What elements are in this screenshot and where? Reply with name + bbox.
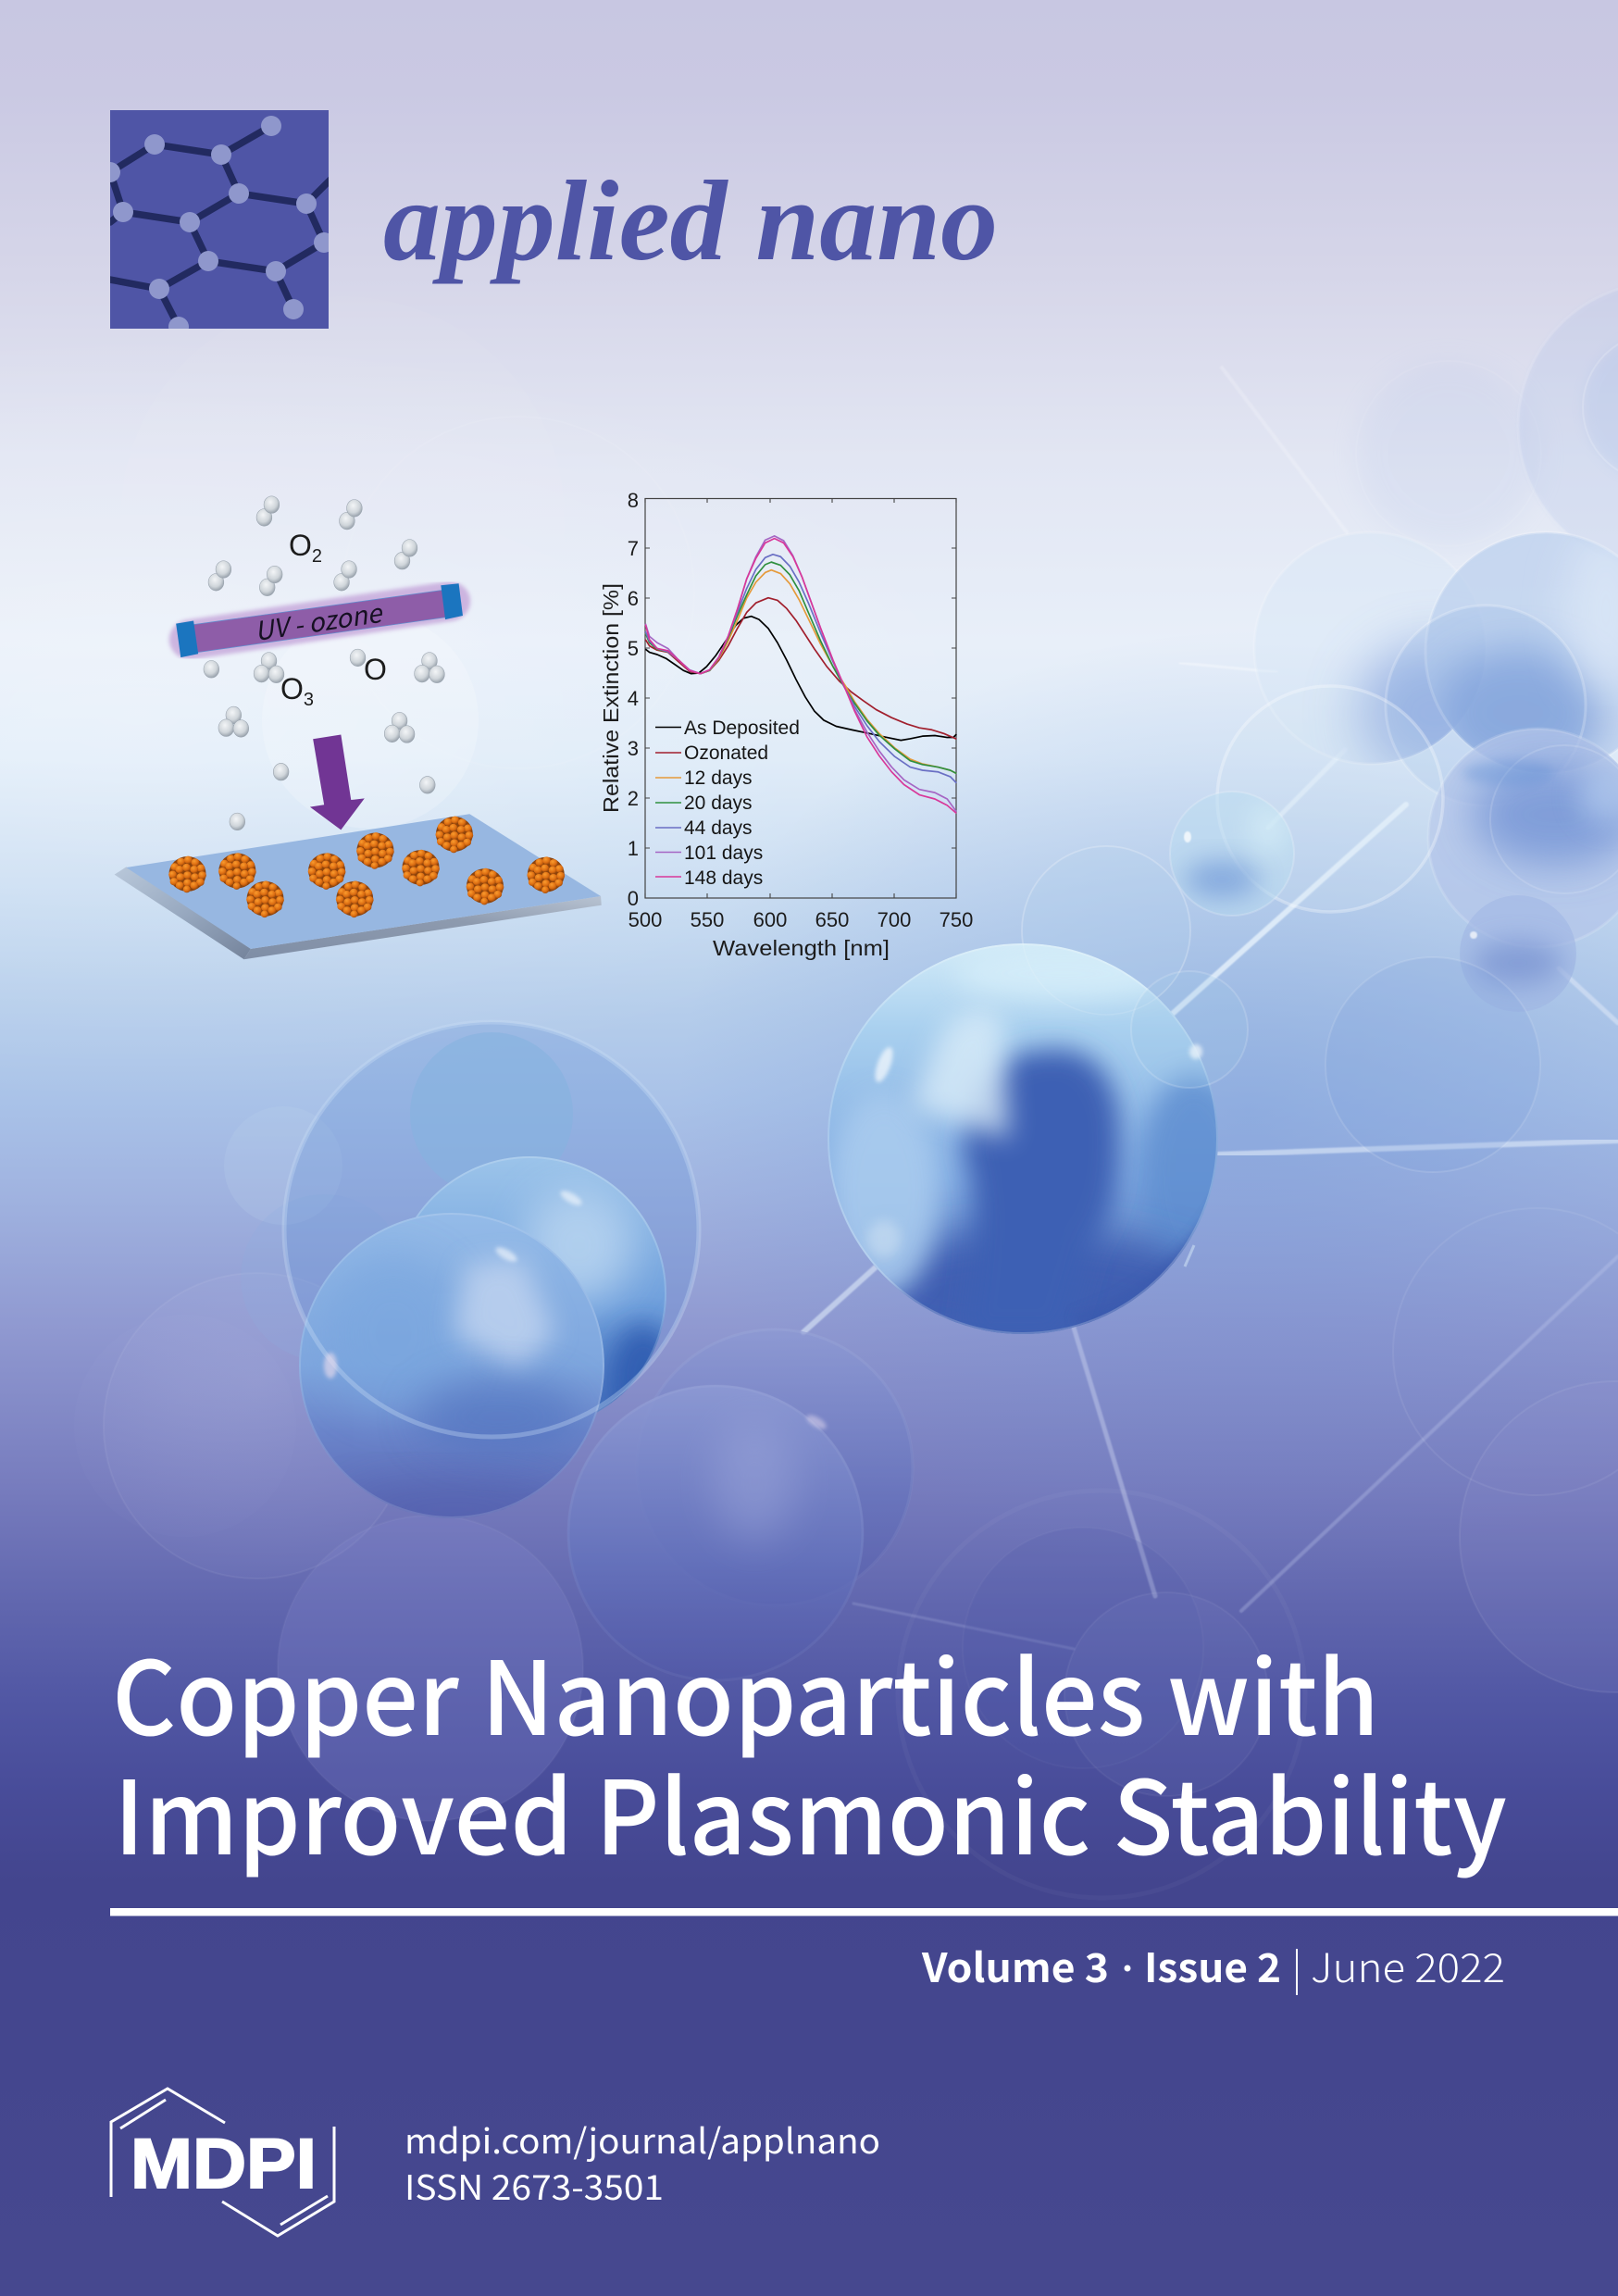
x axis label: Wavelength [nm] bbox=[713, 936, 890, 960]
legend: 12 days bbox=[684, 767, 753, 789]
O3 label: 3 bbox=[304, 690, 314, 710]
x tick labels: 550 bbox=[691, 908, 724, 931]
bubble cluster: lower centre faint bbox=[898, 1491, 1305, 1898]
issue information: Volume 3 bbox=[921, 1937, 1109, 1994]
arrow bbox=[310, 734, 365, 830]
O label: O bbox=[364, 653, 387, 686]
y tick labels bbox=[628, 489, 639, 910]
y tick labels: 3 bbox=[628, 737, 639, 760]
x tick labels: 600 bbox=[753, 908, 787, 931]
y tick labels: 1 bbox=[628, 837, 639, 860]
O2 label: 2 bbox=[312, 546, 322, 567]
journal logo bbox=[110, 110, 329, 329]
divider rule bbox=[110, 1908, 1618, 1916]
y tick labels: 7 bbox=[628, 537, 639, 560]
legend: 44 days bbox=[684, 817, 753, 839]
issue information bbox=[921, 1937, 1505, 1995]
y tick labels: 6 bbox=[628, 587, 639, 610]
sphere cluster: left bbox=[74, 1022, 699, 1821]
y tick labels: 2 bbox=[628, 787, 639, 810]
logo bonds bbox=[110, 126, 331, 327]
legend: 148 days bbox=[684, 867, 763, 889]
legend bbox=[655, 718, 800, 889]
substrate bbox=[115, 814, 602, 959]
article title: Copper Nanoparticles with bbox=[112, 1616, 1379, 1765]
MDPI logo bbox=[111, 2089, 334, 2236]
MDPI logo: MDPI bbox=[131, 2125, 317, 2203]
gas molecules bbox=[204, 496, 444, 830]
ISSN: ISSN 2673-3501 bbox=[404, 2160, 664, 2210]
UV lamp bbox=[176, 583, 463, 657]
O3 label: O bbox=[280, 672, 304, 705]
x tick labels: 750 bbox=[940, 908, 973, 931]
article title: Improved Plasmonic Stability bbox=[114, 1736, 1507, 1884]
journal website: mdpi.com/journal/applnano bbox=[404, 2114, 880, 2164]
O2 label: O bbox=[289, 529, 312, 562]
legend: Ozonated bbox=[684, 742, 768, 764]
issue information: June 2022 bbox=[1311, 1937, 1505, 1994]
legend: 101 days bbox=[684, 842, 763, 864]
legend: As Deposited bbox=[684, 718, 800, 739]
journal name: applied nano bbox=[383, 157, 998, 284]
x tick labels bbox=[629, 908, 973, 931]
y tick labels: 5 bbox=[628, 637, 639, 660]
logo atoms bbox=[110, 116, 329, 329]
issue information: Issue 2 bbox=[1144, 1937, 1281, 1994]
lamp label: UV - ozone bbox=[252, 593, 386, 649]
article title bbox=[112, 1616, 1507, 1884]
sphere cluster: lower middle bbox=[567, 1329, 914, 1681]
x tick labels: 650 bbox=[815, 908, 849, 931]
x tick labels: 500 bbox=[629, 908, 662, 931]
plot frame bbox=[645, 498, 956, 898]
bubble cluster: middle right bbox=[1022, 686, 1618, 1692]
diagram: UV-ozone treatment of copper nanoparticles bbox=[115, 496, 602, 959]
y tick labels: 8 bbox=[628, 489, 639, 512]
y tick labels: 4 bbox=[628, 687, 639, 710]
molecular background: connecting rods bbox=[803, 368, 1618, 1649]
y axis label: Relative Extinction [%] bbox=[599, 583, 623, 813]
chart: relative extinction vs wavelength bbox=[599, 489, 973, 960]
y tick labels: 0 bbox=[628, 887, 639, 910]
copper nanoparticles bbox=[168, 817, 565, 917]
main sphere bbox=[828, 943, 1249, 1334]
bubble cluster: upper right bbox=[1254, 282, 1618, 1012]
background glow bbox=[0, 296, 1618, 1592]
legend: 20 days bbox=[684, 792, 753, 814]
x tick labels: 700 bbox=[877, 908, 911, 931]
data curves bbox=[645, 536, 956, 814]
